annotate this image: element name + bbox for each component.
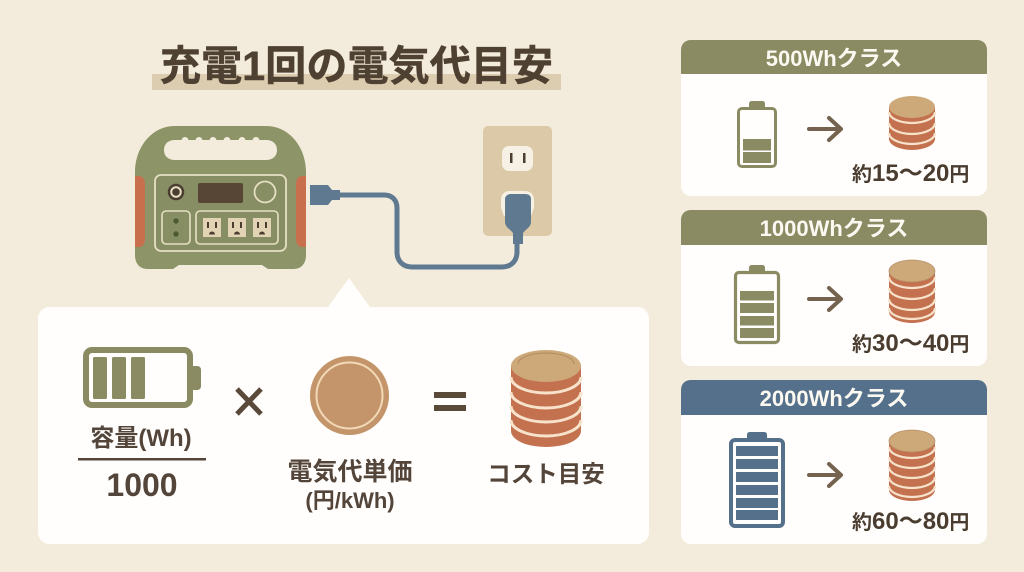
- icon: coin stack: [889, 96, 935, 150]
- panel: 1000Wh class: [681, 210, 987, 366]
- cost label: 約60〜80円: [852, 508, 969, 535]
- title: 充電1回の電気代目安: [160, 43, 553, 89]
- header: 500Wh: [681, 40, 987, 74]
- icon: battery 6 cells: [731, 432, 783, 526]
- icon: coin stack: [889, 260, 935, 323]
- header: 500Wh: 500Whクラス: [766, 46, 902, 71]
- panel: 2000Wh class: [681, 380, 987, 544]
- header: 2000Wh: 2000Whクラス: [760, 386, 908, 411]
- cost label: 約30〜40円: [852, 330, 969, 357]
- icon: battery 4 cells: [736, 265, 778, 342]
- panel: 500Wh class: [681, 40, 987, 196]
- icon: coin stack: [889, 430, 935, 501]
- icon: battery capacity: [86, 350, 201, 405]
- label: capacity fraction: 1000: [106, 467, 178, 503]
- icon: battery 2 cells: [738, 101, 776, 166]
- icon: equals sign: [434, 392, 466, 411]
- arrow: [809, 464, 841, 486]
- label: capacity fraction: 容量(Wh): [90, 425, 192, 452]
- label: capacity fraction: [78, 425, 206, 503]
- arrow: [809, 288, 841, 310]
- icon: multiply sign: [237, 389, 261, 414]
- icon: portable power station: [135, 126, 306, 269]
- label: electricity unit price: (円/kWh): [305, 488, 395, 513]
- icon: wall outlet: [483, 126, 552, 236]
- icon: coin: [310, 356, 389, 435]
- cost label: 約15〜20円: [852, 160, 969, 187]
- arrow: [809, 118, 841, 140]
- power cable with plugs: [310, 185, 531, 267]
- label: electricity unit price: [287, 458, 413, 513]
- label: electricity unit price: 電気代単価: [287, 458, 413, 486]
- icon: coin stack: [511, 350, 581, 447]
- header: 1000Wh: [681, 210, 987, 245]
- header: 2000Wh: [681, 380, 987, 415]
- label: cost estimate: コスト目安: [487, 461, 605, 487]
- header: 1000Wh: 1000Whクラス: [760, 216, 908, 241]
- panel: formula: [38, 278, 649, 544]
